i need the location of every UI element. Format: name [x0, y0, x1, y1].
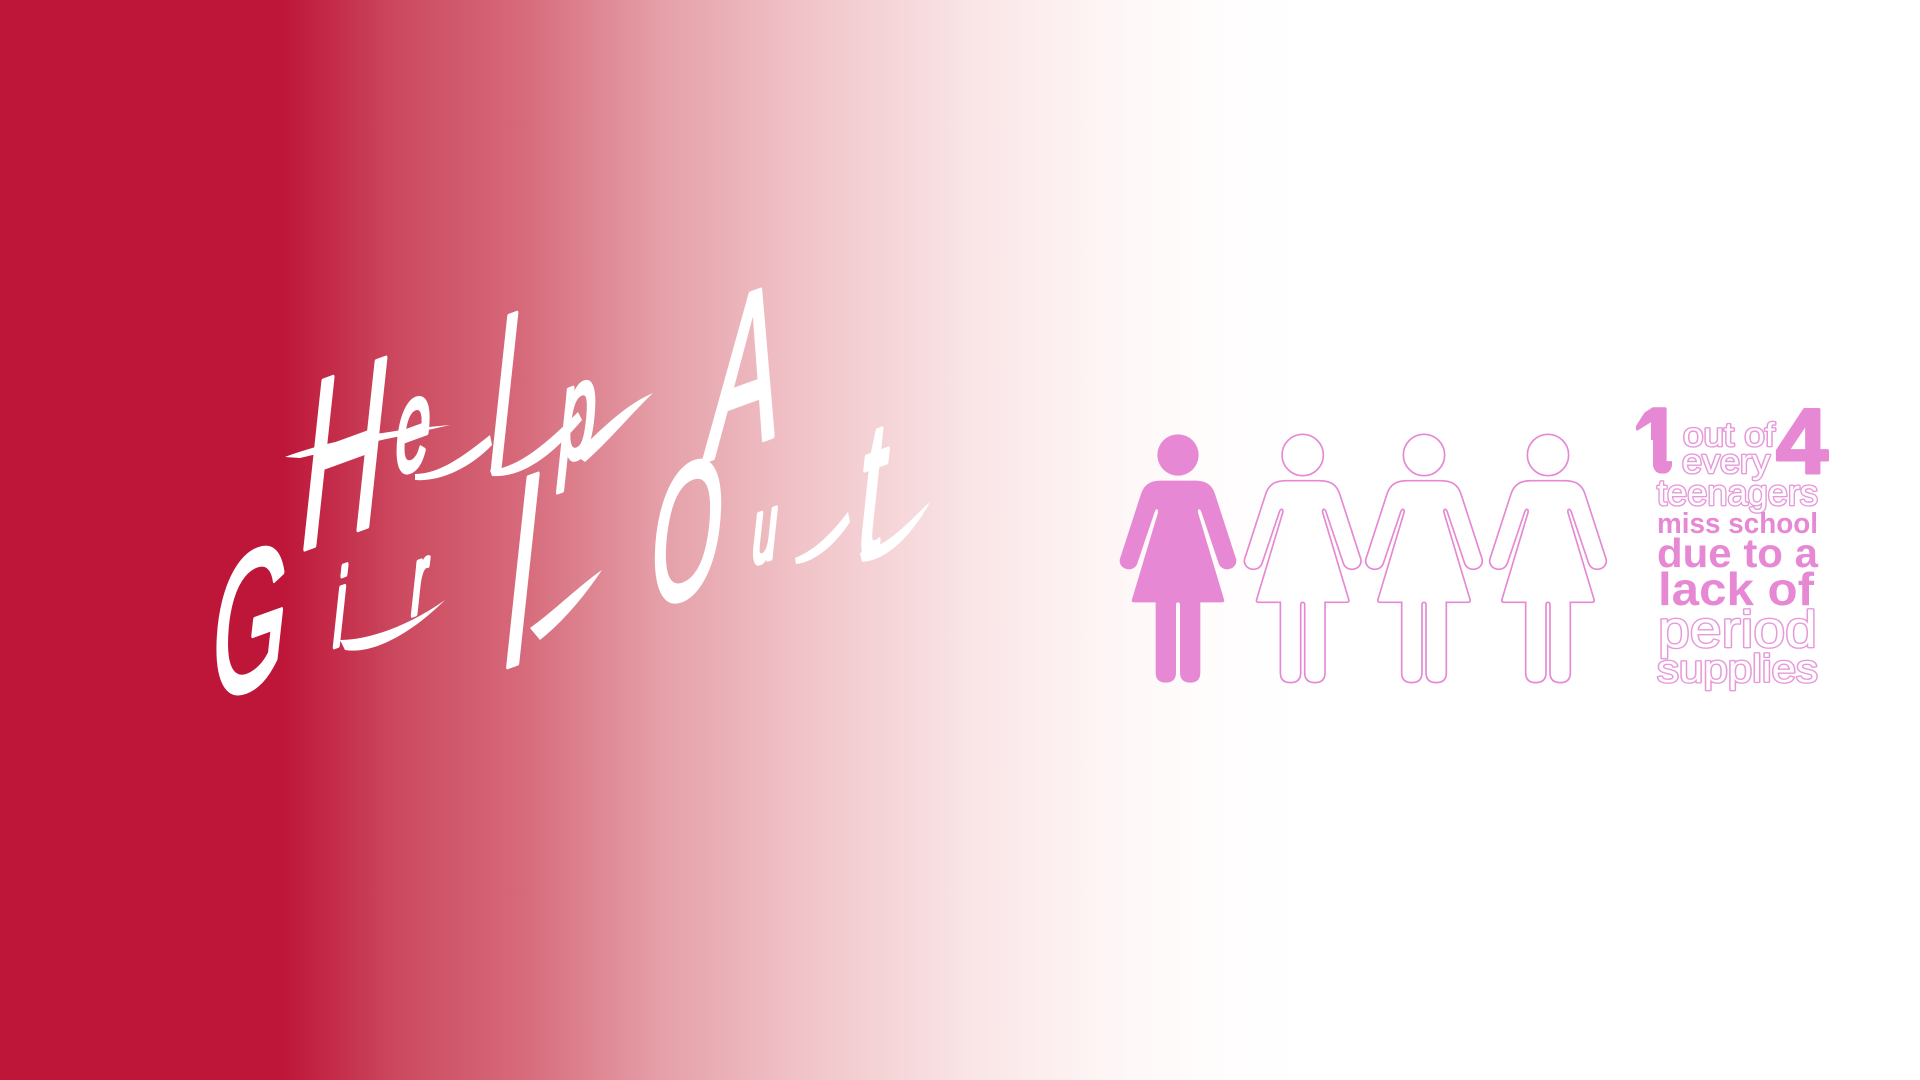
- title word: A: A: [702, 235, 783, 508]
- title word: Girl: G: [211, 499, 288, 743]
- figure 1: filled: [1120, 434, 1236, 683]
- title word: Help: l: [490, 278, 518, 514]
- text: teenagers: teenagers: [1657, 472, 1818, 513]
- text: out of: out of: [1683, 416, 1776, 453]
- title word: Out: t: [857, 379, 890, 602]
- title word: Help: H: [300, 306, 387, 601]
- text: supplies: supplies: [1657, 648, 1818, 691]
- text: due to a: due to a: [1657, 530, 1819, 576]
- title word: Out: O: [650, 413, 724, 650]
- decorative swashes on the title letters: [285, 393, 930, 651]
- title word: Out: u: [752, 474, 778, 585]
- text: miss school: miss school: [1657, 508, 1818, 540]
- figure 2: outline: [1244, 434, 1361, 683]
- text: every: every: [1682, 443, 1770, 481]
- figure 4: outline: [1490, 434, 1606, 683]
- title word: Help: p: [557, 330, 597, 493]
- title word: Girl: i: [333, 547, 348, 671]
- text: lack of: lack of: [1658, 563, 1815, 615]
- title: Help A Girl Out: [210, 229, 930, 829]
- statistic text block: [1631, 390, 1828, 691]
- text: period: period: [1658, 601, 1817, 659]
- title word: Help: e: [395, 347, 432, 503]
- big number 1: 1: [1631, 390, 1682, 492]
- row of four female figures: one in four highlighted: [1120, 434, 1606, 683]
- figure 3: outline: [1366, 434, 1482, 683]
- title word: Girl: r: [411, 523, 430, 637]
- title word: Girl: l: [505, 430, 539, 721]
- big number 4: 4: [1776, 391, 1828, 493]
